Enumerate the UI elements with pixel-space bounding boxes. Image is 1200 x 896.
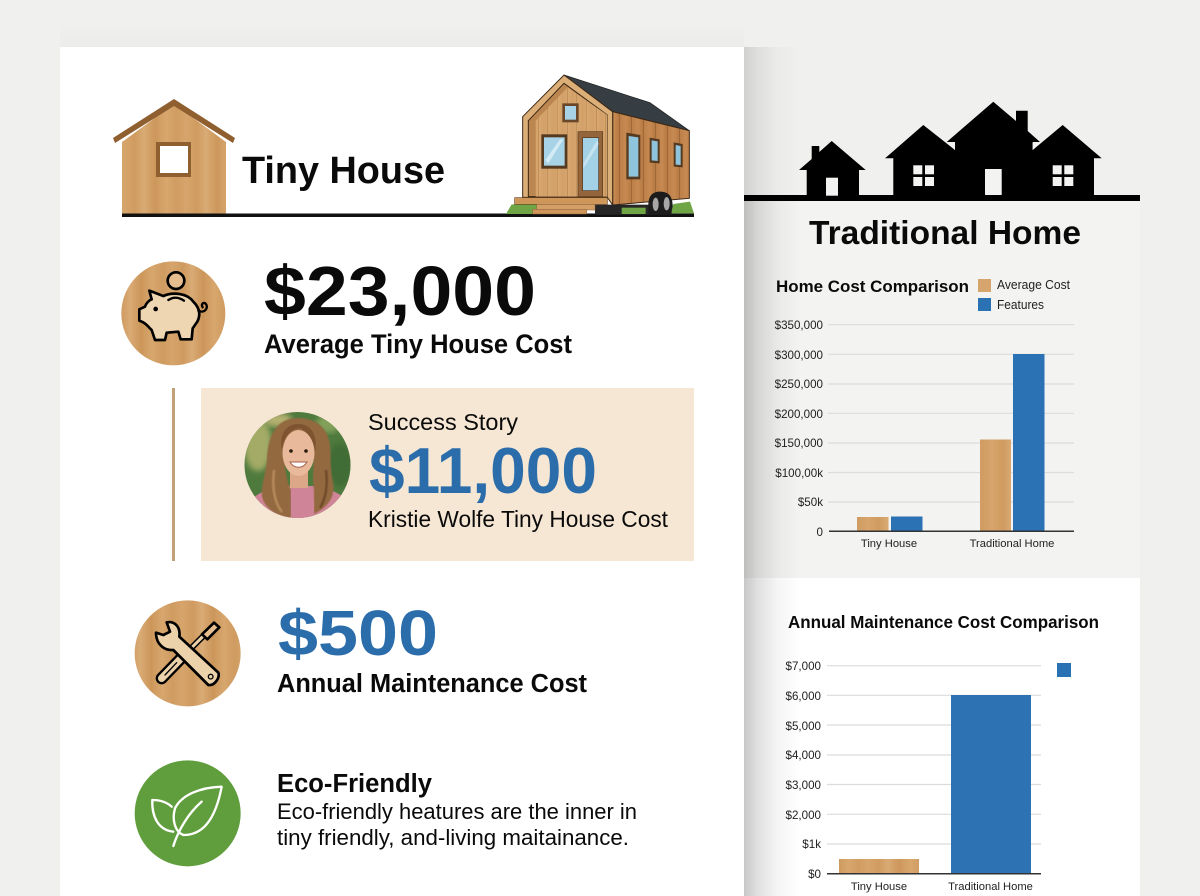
chart: annual maintenance cost comparison [786,612,1099,893]
chart: annual maintenance cost comparison: $7,000 [786,660,821,673]
accent line [172,388,175,561]
chart: home cost comparison: Tiny House [861,538,917,550]
heading: eco-friendly: Eco-Friendly [277,770,433,798]
panel: success story [201,388,694,561]
icon: tiny house on wheels [506,75,694,215]
icon: piggy bank [121,261,225,365]
legend: Features [997,298,1044,312]
chart: home cost comparison: $100,00k [775,467,823,480]
text: success story: Success Story [368,409,518,435]
chart title: Annual Maintenance Cost Comparison [788,612,1099,632]
chart: home cost comparison: $150,000 [775,437,823,450]
chart: home cost comparison: $250,000 [775,378,823,391]
heading: Traditional Home: Traditional Home [809,214,1081,251]
card shadow [744,47,800,896]
stat: average tiny house cost [264,252,572,359]
icon: green leaf [135,760,241,866]
legend swatch [1057,663,1071,677]
chart: home cost comparison: $200,000 [775,408,823,421]
value: $11,000: $11,000 [369,434,597,507]
label: annual maintenance cost: Annual Maintenance Cost [277,670,588,698]
icon: wrench and screwdriver [135,600,241,706]
legend [978,278,1071,312]
chart: home cost comparison: $300,000 [775,349,823,362]
value: $23,000: $23,000 [264,252,536,330]
text block: eco-friendly [277,770,637,850]
ground line [122,214,694,217]
chart: home cost comparison: $50k [798,496,823,509]
icon: neighbourhood silhouette [744,102,1140,201]
photo: Kristie Wolfe portrait [244,412,352,520]
chart: annual maintenance cost comparison: $4,000 [786,749,821,762]
chart: annual maintenance cost comparison: $1k [802,838,821,851]
legend: Average Cost [997,278,1071,292]
chart: home cost comparison [775,277,1074,550]
chart: annual maintenance cost comparison: $6,000 [786,690,821,703]
panel: traditional home maintenance card [744,578,1140,896]
chart: annual maintenance cost comparison: $5,000 [786,720,821,733]
label: average tiny house cost: Average Tiny House Cost [264,329,572,359]
chart: annual maintenance cost comparison: $0 [808,868,821,881]
text: Kristie Wolfe tiny house cost: Kristie Wolfe Tiny House Cost [368,506,668,532]
heading: Tiny House: Tiny House [242,150,445,192]
stat: annual maintenance cost [277,597,588,698]
chart: annual maintenance cost comparison: $2,000 [786,809,821,822]
body line two: tiny friendly, and-living maitainance. [277,825,629,850]
chart: home cost comparison: Traditional Home [970,538,1054,550]
chart: home cost comparison: $350,000 [775,319,823,332]
bars [839,695,1031,874]
chart title: Home Cost Comparison [776,277,969,296]
body line one: Eco-friendly heatures are the inner in [277,799,637,824]
panel: tiny house card [60,47,744,896]
value: $500: $500 [278,597,438,669]
chart: annual maintenance cost comparison: Traditional Home [948,881,1033,893]
icon: simple wood house [113,99,235,214]
chart: annual maintenance cost comparison: $3,000 [786,779,821,792]
bars [857,354,1044,531]
chart: annual maintenance cost comparison: Tiny House [851,881,907,893]
chart: home cost comparison: 0 [817,526,823,539]
